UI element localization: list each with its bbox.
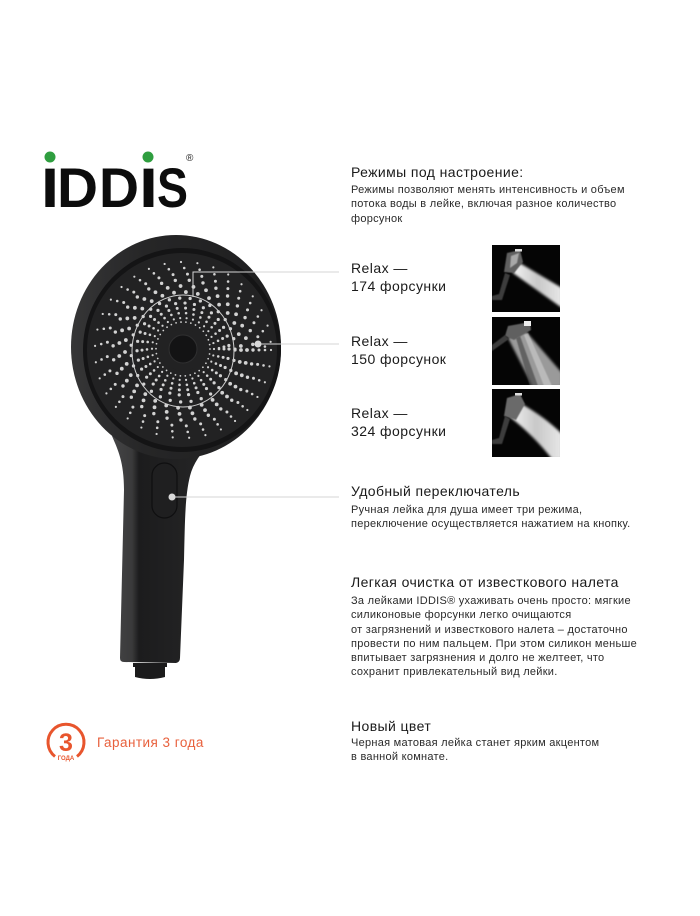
- selector ring: [132, 295, 234, 407]
- logo: D: [99, 156, 139, 219]
- callout dots: [168, 340, 262, 500]
- connector: [133, 663, 167, 679]
- logo: ®: [186, 153, 194, 164]
- switch text: Ручная лейка для душа имеет три режима,: [351, 504, 582, 516]
- cleaning text: от загрязнений и известкового налета – достаточно: [351, 624, 628, 636]
- nozzles: [95, 262, 271, 438]
- label: relax 174: [351, 260, 446, 294]
- label: relax 150: [351, 333, 446, 367]
- modes text: форсунок: [351, 213, 402, 225]
- section: cleaning: [351, 574, 637, 678]
- warranty badge: 3: [59, 729, 73, 757]
- head body: [71, 235, 281, 459]
- modes heading: Режимы под настроение:: [351, 164, 524, 180]
- logo: D: [57, 156, 98, 219]
- modes text: [351, 184, 625, 225]
- section: modes: [351, 164, 625, 225]
- label: relax 174: 174 форсунки: [351, 278, 446, 294]
- handle: [112, 436, 212, 663]
- modes text: Режимы позволяют менять интенсивность и объем: [351, 184, 625, 196]
- cleaning text: силиконовые форсунки легко очищаются: [351, 609, 571, 621]
- photo 2: wide spray: [492, 317, 562, 387]
- section: switch: [351, 483, 630, 530]
- cleaning text: провести по ним пальцем. При этом силикон меньше: [351, 638, 637, 650]
- warranty badge: [48, 724, 84, 762]
- modes text: потока воды в лейке, включая разное количество: [351, 198, 616, 210]
- shower head product: [71, 235, 281, 679]
- logo: S: [157, 156, 188, 219]
- callout lines: [172, 272, 339, 497]
- warranty badge: ГОДА: [58, 756, 75, 762]
- label: relax 150: Relax —: [351, 333, 408, 349]
- label: relax 174: Relax —: [351, 260, 408, 276]
- colour text: [351, 737, 599, 763]
- label: relax 324: Relax —: [351, 405, 408, 421]
- switch button: [152, 463, 177, 518]
- label: relax 324: 324 форсунки: [351, 423, 446, 439]
- logo: I: [41, 156, 59, 219]
- colour heading: Новый цвет: [351, 718, 431, 734]
- label: relax 324: [351, 405, 446, 439]
- section: new colour: [351, 718, 599, 763]
- logo: [41, 152, 194, 219]
- label: relax 150: 150 форсунок: [351, 351, 446, 367]
- colour text: Черная матовая лейка станет ярким акцентом: [351, 737, 599, 749]
- colour text: в ванной комнате.: [351, 751, 448, 763]
- cleaning text: [351, 595, 637, 678]
- cleaning heading: Легкая очистка от известкового налета: [351, 574, 619, 590]
- logo: I: [139, 156, 158, 219]
- cleaning text: За лейками IDDIS® ухаживать очень просто: мягкие: [351, 595, 631, 607]
- warranty text: Гарантия 3 года: [97, 735, 204, 750]
- photo 3: mixed spray: [492, 389, 562, 459]
- switch heading: Удобный переключатель: [351, 483, 520, 499]
- cleaning text: впитывает загрязнения и долго не желтеет, что: [351, 652, 604, 664]
- cleaning text: сохранит привлекательный вид лейки.: [351, 666, 558, 678]
- central button: [162, 329, 204, 371]
- switch text: переключение осуществляется нажатием на кнопку.: [351, 518, 630, 530]
- photo 1: relax spray: [492, 245, 562, 312]
- switch text: [351, 504, 630, 530]
